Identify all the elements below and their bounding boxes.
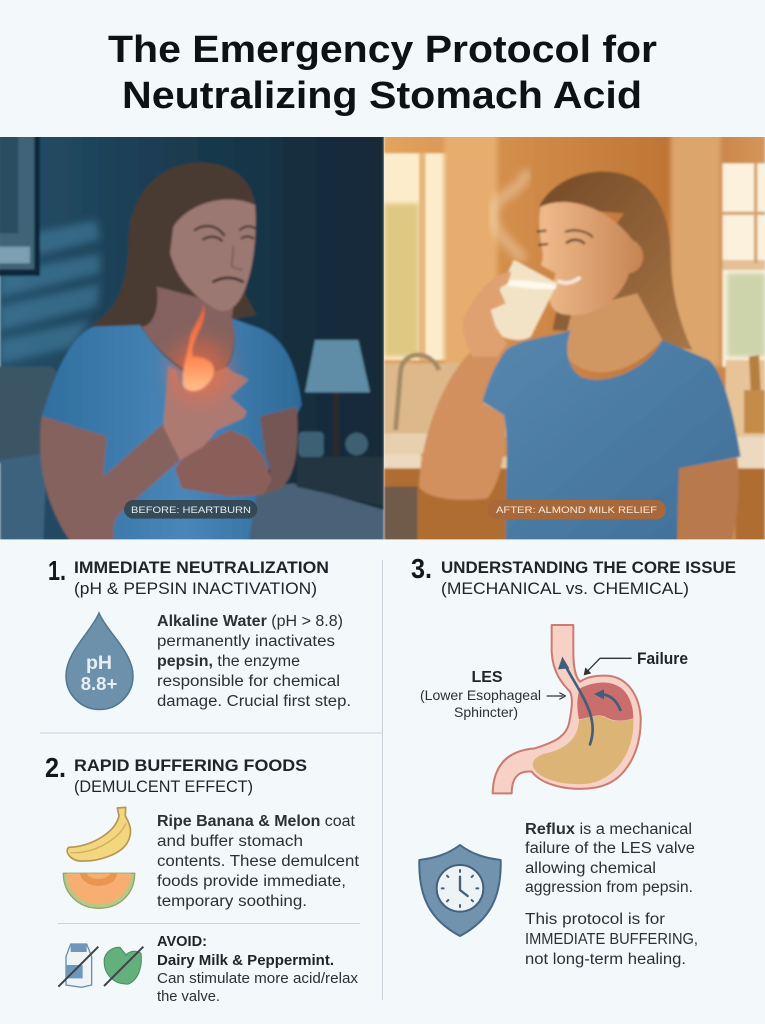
text block: avoid: AVOID: — [157, 934, 207, 950]
hair — [539, 171, 692, 350]
facial features — [195, 226, 255, 282]
text block: banana and melon: foods provide immediate, — [157, 873, 346, 890]
stomach diagram — [493, 625, 641, 793]
label: LES: Sphincter) — [454, 704, 518, 720]
text block: avoid: Can stimulate more acid/relax — [157, 971, 359, 987]
nightstand — [297, 457, 384, 507]
neck — [566, 293, 662, 372]
upper hand — [163, 367, 248, 460]
text block: alkaline water: responsible for chemical — [157, 673, 340, 690]
text block: banana and melon: and buffer stomach — [157, 833, 303, 850]
cabinets and counters — [384, 355, 765, 543]
text block: avoid: Dairy Milk & Peppermint. — [157, 953, 334, 969]
title: Neutralizing Stomach Acid — [122, 75, 642, 117]
text block: reflux: Reflux is a mechanical — [525, 821, 692, 838]
heading 2: (DEMULCENT EFFECT) — [74, 777, 253, 796]
neck — [142, 287, 235, 382]
text block: banana and melon: temporary soothing. — [157, 893, 307, 910]
icon: shield with clock — [419, 845, 501, 936]
flame — [170, 303, 230, 400]
number 3: 3. — [411, 553, 432, 584]
heading 3: (MECHANICAL vs. CHEMICAL) — [441, 579, 689, 598]
face — [539, 202, 643, 315]
left window — [384, 153, 447, 360]
clock and ornament — [298, 432, 368, 457]
text block: protocol note: This protocol is for — [525, 911, 665, 928]
text block: avoid — [157, 934, 359, 1005]
text block: reflux: aggression from pepsin. — [525, 879, 693, 896]
icon: water drop pH 8.8+: pH — [86, 652, 112, 674]
right window — [722, 163, 765, 367]
glass of almond milk — [484, 260, 557, 340]
icon: water drop pH 8.8+: 8.8+ — [81, 673, 117, 694]
text block: alkaline water: permanently inactivates — [157, 633, 335, 650]
bedding — [0, 453, 384, 543]
icon: water drop pH 8.8+ — [66, 613, 133, 710]
title — [108, 29, 657, 117]
heading 3 — [441, 558, 736, 598]
heading 1 — [74, 558, 329, 598]
text block: reflux — [525, 821, 695, 896]
panel: section 2, rapid buffering foods — [45, 752, 360, 1005]
panel: section 3, understanding the core issue — [411, 553, 736, 968]
steam — [493, 170, 527, 260]
shirt — [42, 318, 302, 543]
heading 1: IMMEDIATE NEUTRALIZATION — [74, 558, 329, 577]
heading 2: RAPID BUFFERING FOODS — [74, 756, 307, 775]
heading 3: UNDERSTANDING THE CORE ISSUE — [441, 558, 736, 577]
heading 2 — [74, 756, 307, 796]
text block: protocol note — [525, 911, 698, 968]
shirt — [482, 330, 741, 543]
number 1: 1. — [48, 555, 66, 586]
woman, after — [419, 171, 741, 543]
light stripes on wall — [0, 220, 100, 363]
label text: after: AFTER: ALMOND MILK RELIEF — [496, 505, 657, 516]
icon: crossed-out peppermint leaf — [104, 947, 143, 986]
arm — [40, 416, 180, 543]
picture frame — [0, 133, 40, 276]
text block: alkaline water: Alkaline Water (pH > 8.8) — [157, 613, 343, 630]
text block: alkaline water — [157, 613, 351, 710]
text block: banana and melon: Ripe Banana & Melon coat — [157, 813, 356, 830]
label pill: after — [487, 500, 666, 519]
label: failure: Failure — [637, 649, 688, 668]
forearm holding glass — [419, 353, 505, 500]
icon: crossed-out milk carton — [58, 944, 98, 987]
icon: banana — [67, 807, 130, 861]
text block: reflux: failure of the LES valve — [525, 840, 695, 857]
other arm — [679, 458, 739, 543]
forearm right — [260, 407, 298, 493]
text block: protocol note: IMMEDIATE BUFFERING, — [525, 931, 698, 948]
lamp — [305, 340, 370, 457]
hair — [91, 163, 257, 330]
title: The Emergency Protocol for — [108, 29, 657, 71]
text block: reflux: allowing chemical — [525, 860, 656, 877]
panel: after photo, almond milk relief — [384, 133, 765, 543]
panel: before photo, heartburn — [0, 133, 384, 543]
right curtain — [671, 133, 721, 367]
left curtain — [444, 133, 497, 370]
text block: banana and melon — [157, 813, 360, 910]
pillow — [0, 367, 57, 463]
lower hand — [175, 430, 272, 497]
label pill: before — [124, 500, 257, 519]
facial features — [537, 230, 592, 283]
hand — [463, 272, 511, 357]
text block: avoid: the valve. — [157, 989, 220, 1005]
label text: before: BEFORE: HEARTBURN — [131, 505, 251, 516]
text block: alkaline water: damage. Crucial first step. — [157, 693, 351, 710]
label: LES — [420, 669, 541, 720]
text block: banana and melon: contents. These demulcent — [157, 853, 360, 870]
woman, before — [40, 163, 302, 543]
text block: protocol note: not long-term healing. — [525, 951, 686, 968]
heading 1: (pH & PEPSIN INACTIVATION) — [74, 579, 317, 598]
label: LES: LES — [471, 669, 503, 686]
icon: melon — [63, 873, 135, 908]
faucet — [396, 355, 439, 430]
text block: alkaline water: pepsin, the enzyme — [157, 653, 300, 670]
panel: section 1, immediate neutralization — [48, 555, 351, 710]
number 2: 2. — [45, 752, 66, 783]
label: LES: (Lower Esophageal — [420, 687, 541, 703]
face — [170, 199, 256, 311]
